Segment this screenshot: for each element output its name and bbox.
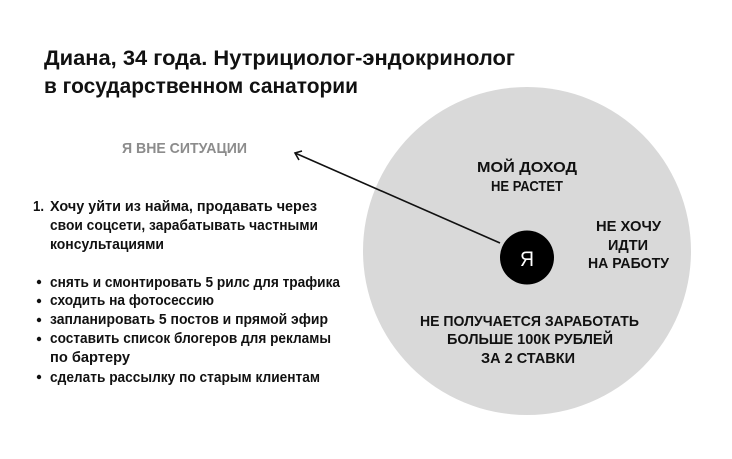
numbered goal text block: Хочу уйти из найма, продавать через [50,199,317,215]
text: do not want to go to work: ИДТИ [608,237,648,254]
self node: black circle with letter [500,230,554,284]
numbered goal text block: свои соцсети, зарабатывать частными [50,218,318,234]
bullet list of tasks: составить список блогеров для рекламы [50,331,331,347]
text: cannot earn more than 100k [420,313,639,367]
text: do not want to go to work: НЕ ХОЧУ [596,218,662,235]
numbered goal text block: 1. [33,199,44,215]
title: Диана, 34 года. Нутрициолог-эндокринолог [44,46,515,70]
bullet list of tasks: запланировать 5 постов и прямой эфир [50,312,328,328]
title: в государственном санатории [44,74,358,98]
panel: grey situation circle [363,87,691,415]
text: income is not growing: МОЙ ДОХОД [477,158,577,176]
bullet list of tasks [37,275,341,386]
text: income is not growing: НЕ РАСТЕТ [491,178,563,195]
bullet list of tasks: сходить на фотосессию [50,293,214,309]
label: outside the situation: Я ВНЕ СИТУАЦИИ [122,140,247,157]
text: income is not growing [477,158,577,195]
text: cannot earn more than 100k: БОЛЬШЕ 100К РУБЛЕЙ [447,330,613,348]
self node: black circle with letter: Я [520,248,534,271]
text: do not want to go to work [588,218,670,272]
arrow: from self to outside the situation [295,151,500,243]
bullet list of tasks: по бартеру [50,350,130,366]
title [44,46,515,98]
bullet list of tasks: снять и смонтировать 5 рилс для трафика [50,275,341,291]
bullet list of tasks: сделать рассылку по старым клиентам [50,370,320,386]
text: cannot earn more than 100k: НЕ ПОЛУЧАЕТСЯ ЗАРАБОТАТЬ [420,313,639,330]
numbered goal text block: консультациями [50,237,164,253]
text: do not want to go to work: НА РАБОТУ [588,255,670,272]
numbered goal text block [33,199,318,253]
text: cannot earn more than 100k: ЗА 2 СТАВКИ [481,350,575,367]
